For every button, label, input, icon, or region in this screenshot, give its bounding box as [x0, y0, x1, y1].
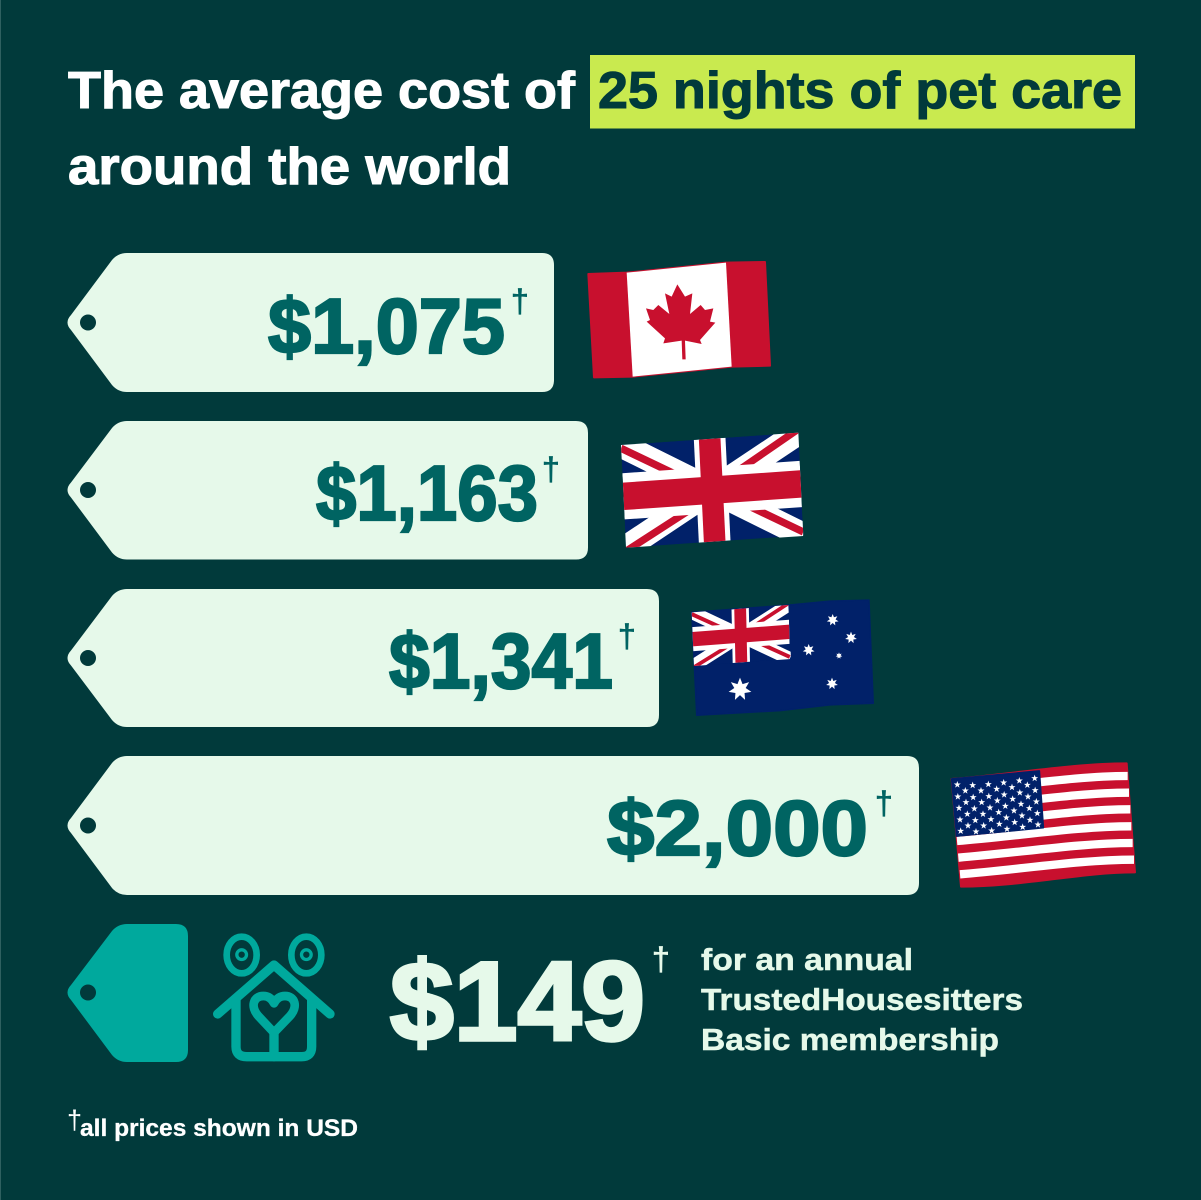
- membership description: TrustedHousesitters: [701, 982, 1023, 1017]
- price tag: Australia: [68, 589, 659, 727]
- footnote: †: [67, 1105, 82, 1135]
- price tag: Australia: †: [618, 618, 636, 654]
- icon: house with pet ears and heart: [218, 937, 330, 1057]
- membership description: [701, 942, 1023, 1057]
- membership description: Basic membership: [701, 1022, 999, 1057]
- title line 1: The average cost of: [68, 62, 576, 120]
- highlight: 25 nights of pet care: 25 nights of pet care: [598, 62, 1122, 120]
- price tag: UK: †: [542, 451, 560, 487]
- price tag: Australia: $1,341: [389, 617, 613, 705]
- title: [68, 55, 1135, 196]
- membership description: for an annual: [701, 942, 913, 977]
- price tag: Canada: $1,075: [268, 282, 505, 370]
- price tag: USA: [68, 756, 919, 895]
- flag: Canada: [588, 262, 770, 377]
- teal price tag: [68, 924, 188, 1062]
- flag: UK: [621, 429, 804, 551]
- price tag: UK: [68, 421, 588, 560]
- price tag: USA: †: [875, 785, 893, 821]
- footnote: all prices shown in USD: [80, 1115, 358, 1142]
- flag: Australia: [692, 600, 873, 715]
- price tag: USA: $2,000: [607, 784, 868, 872]
- price tag: UK: $1,163: [316, 449, 538, 537]
- footnote: [67, 1105, 358, 1142]
- membership price: †: [652, 941, 670, 977]
- title line 2: around the world: [68, 138, 511, 196]
- flag: USA: [952, 763, 1135, 887]
- price tag: Canada: [68, 253, 554, 392]
- membership price: $149: [390, 939, 645, 1064]
- price tag: Canada: †: [511, 283, 529, 319]
